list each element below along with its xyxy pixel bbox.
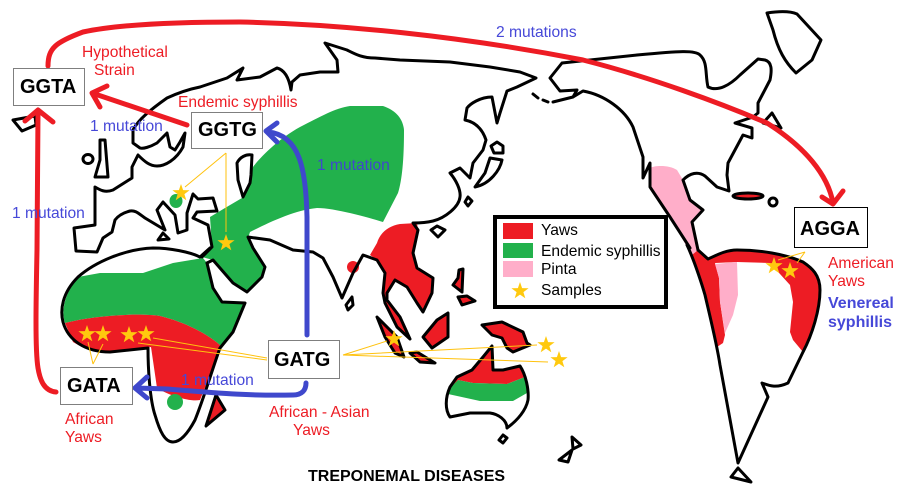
mutation label: GGTG to GGTA: 1 mutation: [90, 118, 163, 135]
green band: Australia: [448, 377, 527, 401]
legend: samples: [511, 282, 602, 299]
arrow: GGTA to AGGA, 2 mutations: [48, 22, 843, 204]
island: Hispaniola: [769, 198, 777, 206]
box: AGGA: [794, 208, 868, 248]
mutation label: GGTA to AGGA: 2 mutations: [496, 24, 577, 41]
island: Borneo: [423, 313, 448, 348]
North America coastline: [550, 52, 771, 250]
mutation label: GATG to GATA: 1 mutation: [181, 372, 254, 389]
island: Philippines north: [453, 269, 463, 292]
island: Tierra del Fuego: [731, 468, 751, 482]
island: Tasmania: [499, 435, 507, 443]
box: GATA: [60, 368, 132, 404]
island: Ireland: [83, 154, 93, 164]
legend: pinta: Pinta: [541, 261, 577, 278]
island: Philippines south: [458, 296, 475, 305]
island: Sicily: [158, 233, 169, 240]
box: GGTG: GGTG: [198, 119, 257, 141]
legend: endemic syphilis: Endemic syphillis: [541, 243, 661, 260]
island: Iceland: [13, 116, 36, 131]
Australia coastline: [446, 346, 528, 428]
Alaska strait dashes: [533, 94, 548, 102]
label: american yaws: Yaws: [828, 273, 865, 290]
red region: yaws in South America: [692, 250, 820, 352]
island: Honshu: [475, 158, 502, 187]
yellow sample connector lines: [88, 153, 805, 364]
box: GATA: GATA: [67, 375, 121, 397]
red dot: India: [347, 261, 359, 273]
Africa coastline: [62, 248, 245, 442]
sample stars: [78, 184, 799, 367]
island: Cuba: [733, 193, 763, 199]
green region: endemic syphilis in Africa: [63, 258, 245, 347]
island: Sri Lanka: [346, 297, 353, 310]
box: AGGA: AGGA: [800, 218, 860, 240]
legend: samples: Samples: [541, 282, 602, 299]
islands: New Zealand: [559, 437, 581, 462]
label: african-asian yaws: African - Asian: [269, 404, 370, 421]
Australia land: [450, 346, 525, 392]
label: hypothetical strain: Strain: [94, 62, 135, 79]
pink region: pinta in South America: [715, 262, 738, 333]
sea: Caspian: [237, 155, 252, 197]
box: GATG: GATG: [274, 349, 330, 371]
island: Newfoundland: [763, 113, 781, 128]
label: venereal syphilis: syphillis: [828, 314, 892, 331]
arrow: GATA to GGTA: [25, 110, 56, 392]
box: GATG: [268, 340, 340, 378]
legend: [495, 217, 666, 307]
label: african yaws: Yaws: [65, 429, 102, 446]
label: african yaws: African: [65, 411, 114, 428]
label: hypothetical strain: Hypothetical: [82, 44, 168, 61]
South America coastline: [687, 245, 820, 463]
label: venereal syphilis: Venereal: [828, 295, 894, 312]
green region: endemic syphilis in Asia: [202, 106, 404, 292]
red region: yaws in Africa: [65, 315, 222, 400]
island: Hokkaido: [491, 142, 503, 153]
Eurasia coastline: [74, 43, 536, 339]
label: african-asian yaws: Yaws: [293, 422, 330, 439]
label: endemic syphilis: Endemic syphillis: [178, 94, 298, 111]
legend: yaws: [503, 222, 578, 239]
arrow: GATG to GATA: [135, 377, 306, 398]
island: Java: [410, 352, 435, 363]
box: GGTG: [192, 112, 262, 148]
green dot: Europe: [170, 194, 182, 208]
island: Taiwan: [431, 226, 445, 237]
legend: pinta: [503, 261, 577, 278]
box: GGTA: [14, 68, 84, 106]
legend: yaws: Yaws: [541, 222, 578, 239]
island: Madagascar: [206, 395, 225, 426]
arrow: GGTG to GGTA: [92, 86, 187, 125]
red region: South-East Asia: [370, 223, 433, 339]
island: small Japan: [465, 197, 472, 206]
mutation label: GATA to GGTA: 1 mutation: [12, 205, 85, 222]
mutation label: GATG to GGTG: 1 mutation: [317, 157, 390, 174]
arrow: GATG to GGTG: [266, 123, 307, 335]
island: New Guinea: [482, 322, 530, 352]
title: TREPONEMAL DISEASES: [308, 468, 505, 485]
island: Great Britain: [95, 140, 108, 177]
pink region: pinta in Central America: [650, 166, 703, 256]
green dot: southern Africa: [167, 394, 183, 410]
box: GGTA: GGTA: [20, 76, 76, 98]
label: american yaws: American: [828, 255, 894, 272]
Greenland: [767, 12, 821, 73]
island: Sumatra: [377, 317, 404, 357]
